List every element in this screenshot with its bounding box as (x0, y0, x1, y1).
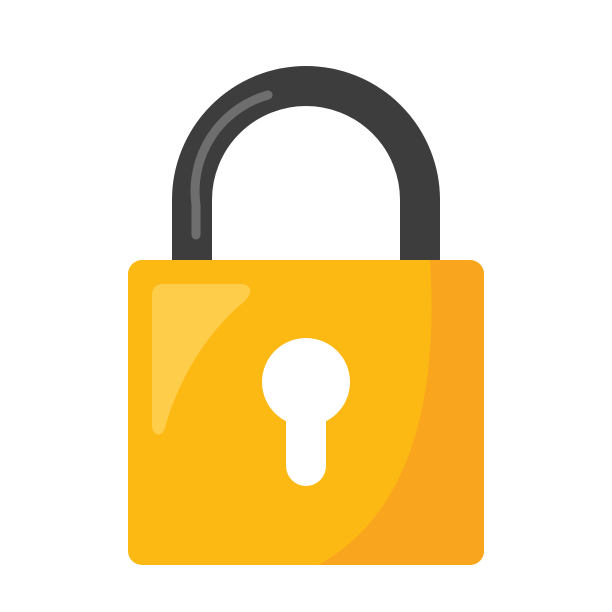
lock body (128, 260, 484, 565)
shackle (192, 86, 420, 265)
keyhole (262, 338, 350, 486)
body highlight (152, 284, 250, 434)
